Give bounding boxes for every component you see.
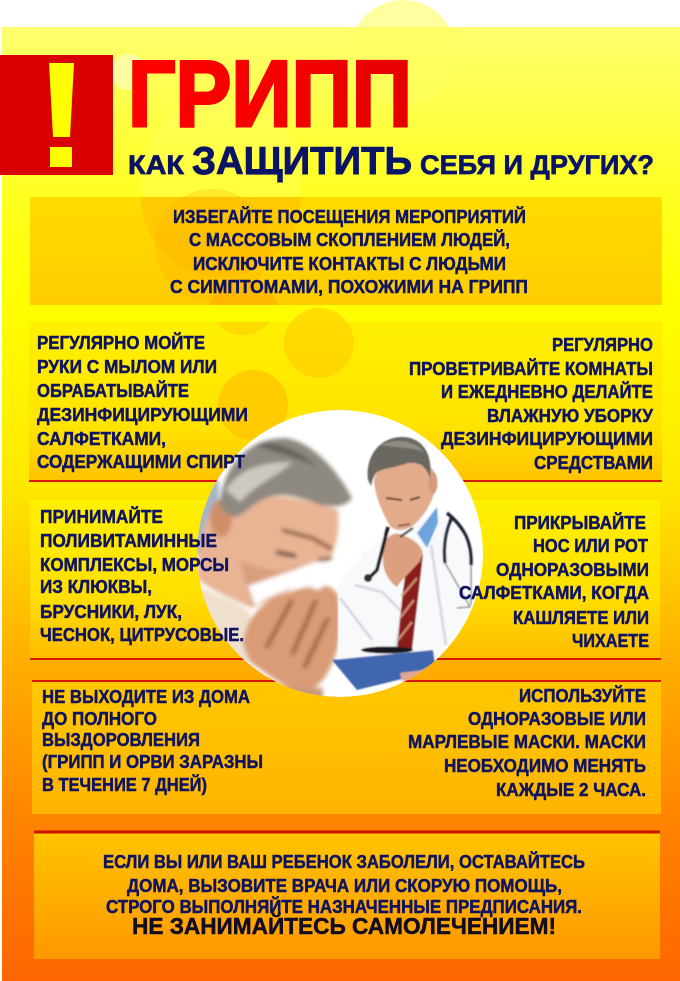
left tip: vitamins bbox=[40, 506, 244, 645]
right tip: masks: МАРЛЕВЫЕ МАСКИ. МАСКИ bbox=[408, 731, 646, 752]
left tip: stay home bbox=[42, 686, 263, 795]
panel: row 2 background bbox=[30, 500, 661, 660]
left tip: vitamins: БРУСНИКИ, ЛУК, bbox=[40, 601, 182, 622]
left tip: wash hands: РЕГУЛЯРНО МОЙТЕ bbox=[37, 332, 205, 353]
doctor bbox=[332, 437, 472, 690]
right tip: ventilate rooms: ДЕЗИНФИЦИРУЮЩИМИ bbox=[441, 428, 653, 449]
right tip: ventilate rooms bbox=[409, 334, 653, 473]
right tip: ventilate rooms: И ЕЖЕДНЕВНО ДЕЛАЙТЕ bbox=[441, 381, 653, 402]
icon: red square with exclamation mark bbox=[0, 55, 113, 175]
right tip: masks: ОДНОРАЗОВЫЕ ИЛИ bbox=[468, 708, 646, 729]
right tip: ventilate rooms: СРЕДСТВАМИ bbox=[534, 452, 653, 473]
left tip: stay home: (ГРИПП И ОРВИ ЗАРАЗНЫ bbox=[42, 751, 263, 772]
right tip: masks bbox=[408, 685, 646, 800]
patient bbox=[195, 438, 352, 700]
panel: row 1 background bbox=[29, 308, 662, 482]
title: ГРИПП bbox=[128, 41, 412, 146]
left tip: wash hands bbox=[37, 332, 248, 472]
left tip: wash hands: ОБРАБАТЫВАЙТЕ bbox=[37, 380, 189, 401]
left tip: vitamins: ПОЛИВИТАМИННЫЕ bbox=[40, 530, 217, 551]
subtitle: ЗАЩИТИТЬ bbox=[192, 140, 412, 183]
right tip: ventilate rooms: ПРОВЕТРИВАЙТЕ КОМНАТЫ bbox=[409, 358, 653, 379]
right tip: cover nose and mouth: САЛФЕТКАМИ, КОГДА bbox=[459, 582, 649, 603]
panel: avoid crowds bbox=[30, 189, 662, 305]
left tip: wash hands: РУКИ С МЫЛОМ ИЛИ bbox=[37, 356, 217, 377]
right tip: cover nose and mouth: ЧИХАЕТЕ bbox=[572, 630, 649, 651]
left tip: vitamins: КОМПЛЕКСЫ, МОРСЫ bbox=[40, 554, 229, 575]
left tip: stay home: ВЫЗДОРОВЛЕНИЯ bbox=[42, 729, 200, 750]
right tip: ventilate rooms: РЕГУЛЯРНО bbox=[552, 334, 653, 355]
warning: no self-treatment: НЕ ЗАНИМАЙТЕСЬ САМОЛЕЧЕНИЕМ! bbox=[132, 912, 556, 939]
right tip: cover nose and mouth: ПРИКРЫВАЙТЕ bbox=[514, 512, 646, 533]
right tip: ventilate rooms: ВЛАЖНУЮ УБОРКУ bbox=[487, 405, 653, 426]
avoid crowds text: С МАССОВЫМ СКОПЛЕНИЕМ ЛЮДЕЙ, bbox=[189, 229, 510, 250]
left tip: stay home: НЕ ВЫХОДИТЕ ИЗ ДОМА bbox=[42, 686, 250, 707]
advice text: ЕСЛИ ВЫ ИЛИ ВАШ РЕБЕНОК ЗАБОЛЕЛИ, ОСТАВАЙТЕСЬ bbox=[103, 851, 585, 872]
photo: patient and doctor in a circle bbox=[195, 410, 483, 700]
right tip: masks: НЕОБХОДИМО МЕНЯТЬ bbox=[444, 755, 646, 776]
avoid crowds text: ИЗБЕГАЙТЕ ПОСЕЩЕНИЯ МЕРОПРИЯТИЙ bbox=[173, 206, 526, 227]
right tip: cover nose and mouth bbox=[459, 512, 649, 651]
panel: if you fall ill bbox=[34, 830, 660, 959]
right tip: cover nose and mouth: ОДНОРАЗОВЫМИ bbox=[496, 559, 649, 580]
subtitle bbox=[128, 140, 654, 183]
advice text: ДОМА, ВЫЗОВИТЕ ВРАЧА ИЛИ СКОРУЮ ПОМОЩЬ, bbox=[127, 875, 562, 896]
left tip: vitamins: ПРИНИМАЙТЕ bbox=[40, 506, 163, 527]
right tip: cover nose and mouth: КАШЛЯЕТЕ ИЛИ bbox=[513, 607, 649, 628]
left tip: vitamins: ИЗ КЛЮКВЫ, bbox=[40, 576, 152, 597]
advice text bbox=[103, 851, 585, 917]
left tip: stay home: В ТЕЧЕНИЕ 7 ДНЕЙ) bbox=[42, 774, 207, 795]
right tip: masks: КАЖДЫЕ 2 ЧАСА. bbox=[496, 779, 646, 800]
decorative circles bbox=[110, 0, 456, 258]
subtitle: СЕБЯ И ДРУГИХ? bbox=[420, 150, 654, 180]
subtitle: КАК bbox=[128, 150, 185, 180]
left tip: vitamins: ЧЕСНОК, ЦИТРУСОВЫЕ. bbox=[40, 624, 244, 645]
avoid crowds text: С СИМПТОМАМИ, ПОХОЖИМИ НА ГРИПП bbox=[170, 276, 528, 297]
left tip: stay home: ДО ПОЛНОГО bbox=[42, 708, 157, 729]
avoid crowds text: ИСКЛЮЧИТЕ КОНТАКТЫ С ЛЮДЬМИ bbox=[193, 253, 506, 274]
left tip: wash hands: ДЕЗИНФИЦИРУЮЩИМИ bbox=[37, 404, 248, 425]
right tip: cover nose and mouth: НОС ИЛИ РОТ bbox=[533, 535, 649, 556]
left tip: wash hands: СОДЕРЖАЩИМИ СПИРТ bbox=[37, 451, 246, 472]
avoid crowds text bbox=[170, 206, 528, 297]
panel: row 3 background bbox=[32, 680, 661, 814]
right tip: masks: ИСПОЛЬЗУЙТЕ bbox=[519, 685, 646, 706]
left tip: wash hands: САЛФЕТКАМИ, bbox=[37, 428, 166, 449]
advice text: СТРОГО ВЫПОЛНЯЙТЕ НАЗНАЧЕННЫЕ ПРЕДПИСАНИЯ. bbox=[106, 896, 582, 917]
